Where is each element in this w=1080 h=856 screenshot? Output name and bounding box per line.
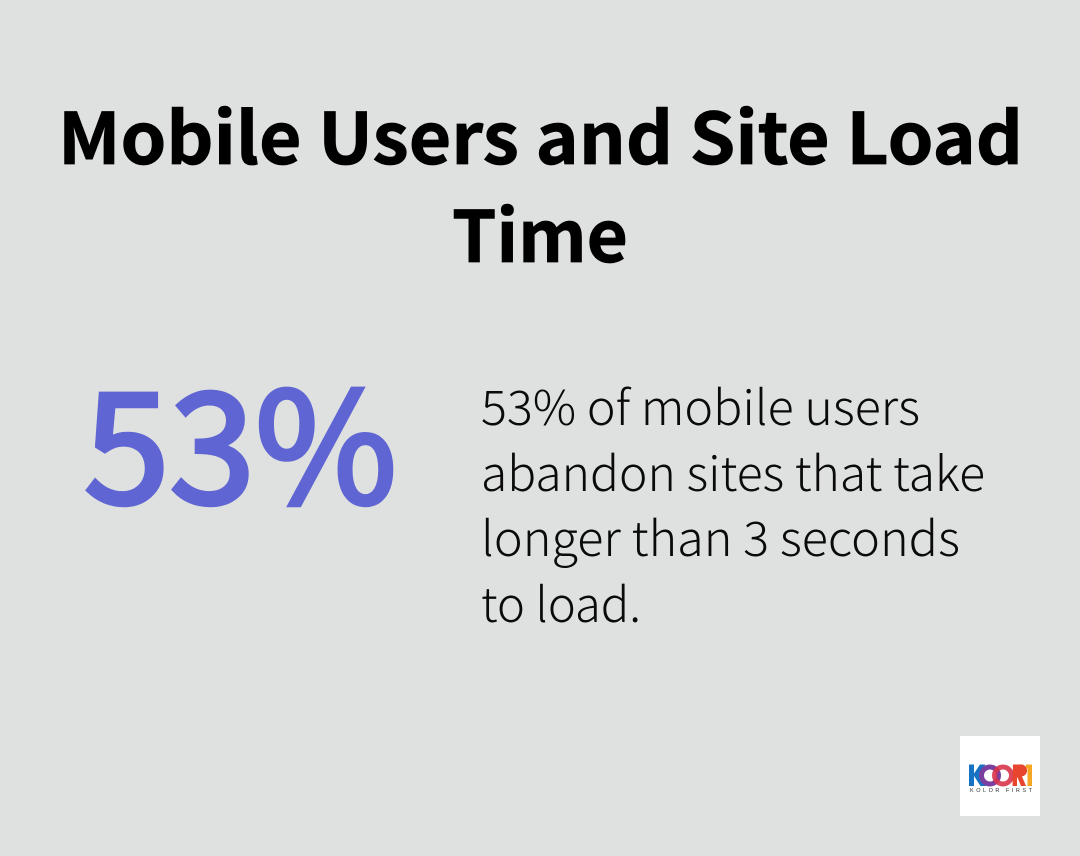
description text: abandon sites that take [481,435,985,505]
big statistic: 53%: 53% [84,327,397,548]
logo letter K [969,764,986,786]
logo rings O O [982,767,1012,784]
description text [481,369,985,636]
title [58,83,1023,283]
description text: longer than 3 seconds [481,500,960,570]
logo digit 1 [1026,764,1032,786]
title: Mobile Users and Site Load [58,83,1023,185]
logo: KOOR1 Kolor First [960,736,1040,816]
description text: 53% of mobile users [481,369,920,439]
logo tagline: KOLOR FIRST [970,788,1033,794]
description text: to load. [481,566,641,636]
logo letter R [1012,764,1027,786]
title: Time [452,181,628,283]
